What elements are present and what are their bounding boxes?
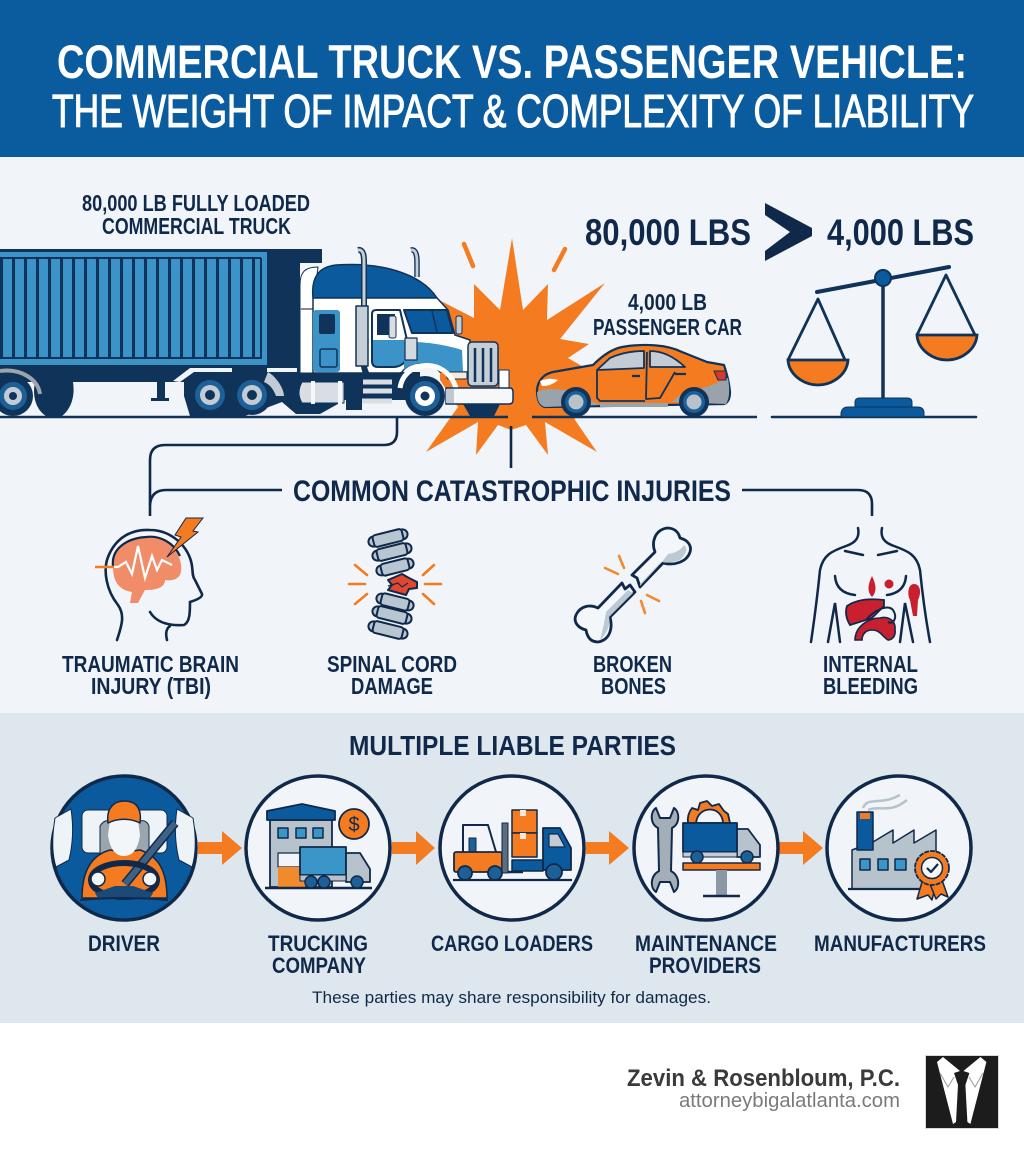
label: commercial truck [82,190,310,239]
bone rays [605,556,659,613]
cab steps [358,382,392,401]
windshield [404,310,453,333]
label: traumatic brain injury: TRAUMATIC BRAIN [62,651,239,677]
label: spinal cord damage: DAMAGE [351,673,433,699]
spark right [554,249,565,270]
note: These parties may share responsibility for damages. [312,988,711,1007]
balance scale [772,267,977,417]
label: internal bleeding: BLEEDING [823,673,918,699]
fuel tank [299,382,344,403]
heading: multiple liable parties: MULTIPLE LIABLE PARTIES [349,730,676,761]
icon: internal bleeding torso [811,528,930,642]
label: internal bleeding [823,651,918,699]
door [372,340,405,367]
label: broken bones: BROKEN [593,651,672,677]
panel: multiple liable parties [0,713,1024,1023]
label: passenger car [593,289,742,340]
headlight and front fascia [447,372,467,379]
right pan [917,275,975,335]
label: internal bleeding: INTERNAL [823,651,918,677]
label: trucking company: COMPANY [272,953,366,978]
trailer [0,249,322,416]
icon: maintenance providers [634,776,778,920]
trailer landing gear [151,382,169,401]
label: traumatic brain injury: INJURY (TBI) [91,673,211,699]
chassis [172,368,420,416]
label: passenger car: 4,000 LB [628,289,707,315]
icon: broken bone [575,528,691,642]
hood [404,342,463,372]
label: commercial truck: COMMERCIAL TRUCK [102,213,291,239]
icon: trucking company [246,776,390,920]
label: commercial truck: 80,000 LB FULLY LOADED [82,190,310,216]
left pan [788,299,845,360]
label: maintenance providers [635,931,777,978]
cab roof [313,264,437,298]
label: broken bones: BONES [601,673,666,699]
website: attorneybigalatlanta.com [679,1090,900,1112]
greater-than symbol [765,203,812,261]
bumper [446,388,513,404]
weight comparison: 80,000 LBS [585,212,751,253]
arrow 3 [586,831,629,865]
dollar sign: $ [348,814,360,836]
commercial truck illustration [0,249,513,416]
weight comparison: 4,000 LBS [827,212,974,253]
label: manufacturers: MANUFACTURERS [814,931,986,956]
label: trucking company [268,931,368,978]
arrow 2 [392,831,435,865]
firm name: Zevin & Rosenbloum, P.C. [627,1065,900,1092]
icon: driver [52,776,196,920]
ground line left [0,416,508,418]
weight comparison [585,203,974,261]
sleeper rear panel [300,267,318,373]
heading: common catastrophic injuries: COMMON CATASTROPHIC INJURIES [293,475,731,508]
spine rays [349,565,441,604]
label: cargo loaders: CARGO LOADERS [431,931,593,956]
passenger car [537,345,730,417]
label: driver: DRIVER [88,931,160,956]
under-cab dark block [346,373,362,410]
injury connector lines [150,418,872,516]
ground line right [532,416,757,418]
grille [468,342,498,386]
panel: upper background [0,157,1024,713]
sleeper side [313,310,340,372]
header banner [0,0,1024,157]
label: spinal cord damage [327,651,457,699]
label: maintenance providers: PROVIDERS [649,953,761,978]
icon: manufacturers [827,776,971,920]
front fender [400,365,456,388]
label: broken bones [593,651,672,699]
footer branding [627,1056,998,1128]
wheels [0,375,445,416]
label: passenger car: PASSENGER CAR [593,314,742,340]
arrow 1 [198,831,242,865]
explosion burst [426,238,605,455]
spark left [464,244,473,266]
exhaust stacks [358,250,369,378]
icon: spine [349,527,441,641]
label: traumatic brain injury [62,651,239,699]
logo: suit and tie [926,1056,998,1128]
icon: traumatic brain injury [95,518,203,640]
label: maintenance providers: MAINTENANCE [635,931,777,956]
icon: cargo loaders [440,776,584,920]
label: spinal cord damage: SPINAL CORD [327,651,457,677]
label: trucking company: TRUCKING [268,931,368,956]
arrow 4 [779,831,823,865]
cab body [313,298,470,373]
